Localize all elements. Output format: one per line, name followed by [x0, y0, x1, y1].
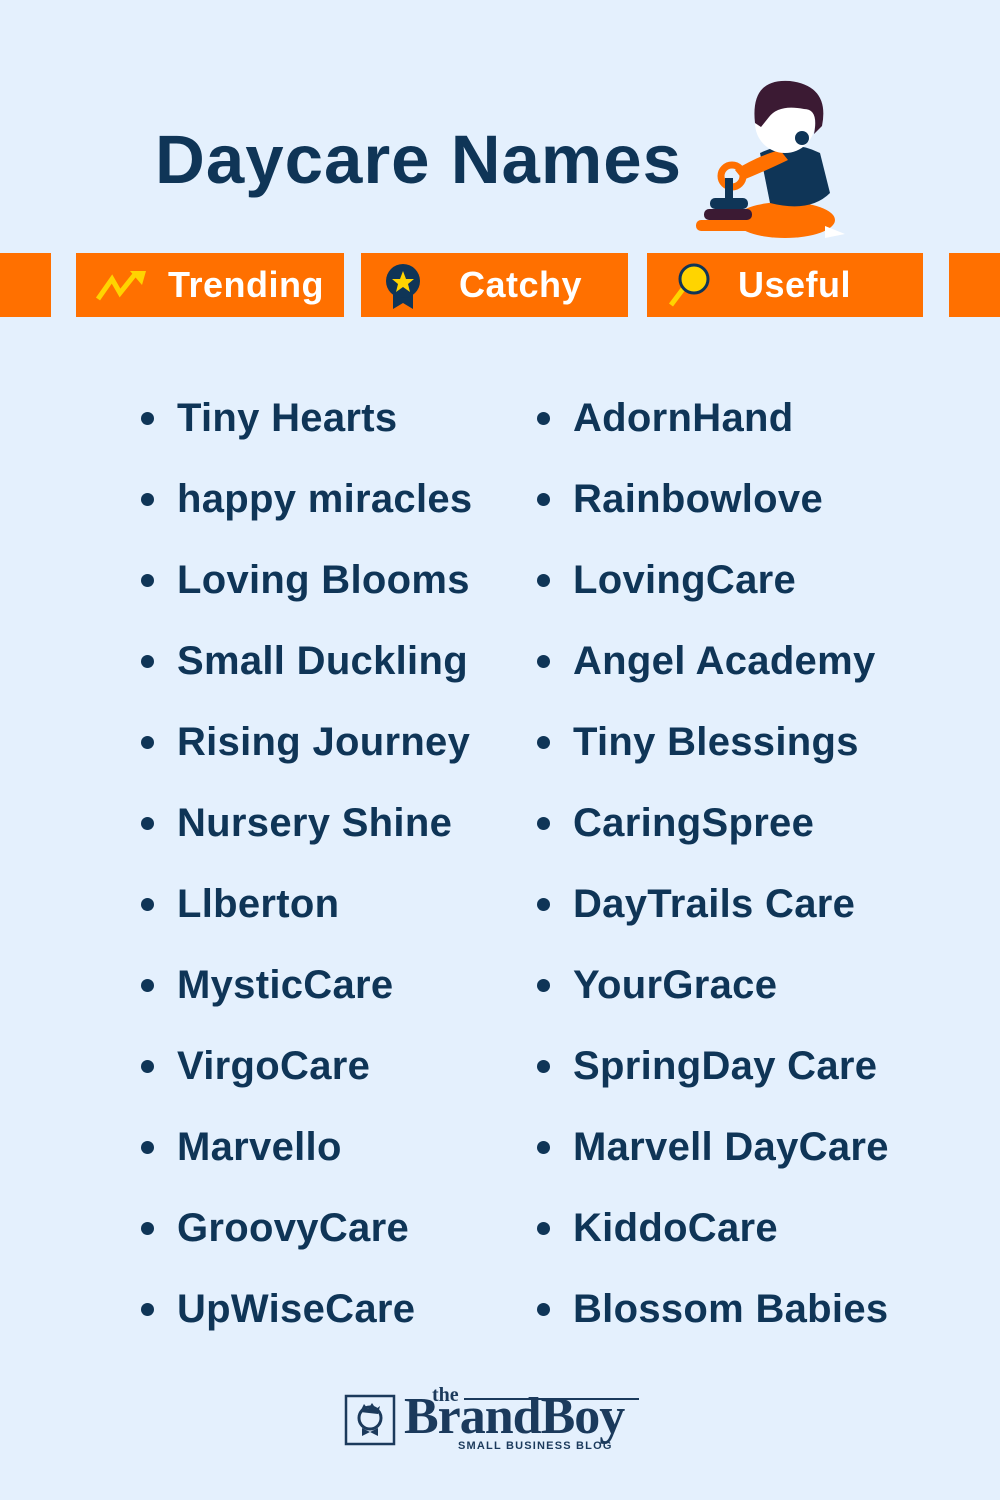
- list: left column: Nursery Shine: [177, 801, 452, 845]
- list: left column: Rising Journey: [177, 720, 470, 764]
- list: left column: [141, 396, 472, 1331]
- list: left column: Llberton: [177, 882, 339, 926]
- list: left column: Small Duckling: [177, 639, 468, 683]
- list: left column: MysticCare: [177, 963, 393, 1007]
- logo: the BrandBoy: the: [432, 1384, 459, 1406]
- logo: the BrandBoy: [344, 1384, 639, 1452]
- list: right column: CaringSpree: [573, 801, 814, 845]
- tab: Useful: Useful: [738, 264, 851, 305]
- list: left column: GroovyCare: [177, 1206, 409, 1250]
- list: left column: VirgoCare: [177, 1044, 370, 1088]
- icon: trend arrow: [96, 271, 146, 300]
- logo: the BrandBoy: SMALL BUSINESS BLOG: [458, 1440, 613, 1452]
- list: right column: KiddoCare: [573, 1206, 778, 1250]
- list: right column: DayTrails Care: [573, 882, 855, 926]
- list: right column: Blossom Babies: [573, 1287, 888, 1331]
- list: right column: AdornHand: [573, 396, 793, 440]
- list: right column: [537, 396, 889, 1331]
- list: left column: happy miracles: [177, 477, 472, 521]
- list: right column: YourGrace: [573, 963, 777, 1007]
- list: right column: Marvell DayCare: [573, 1125, 889, 1169]
- list: left column: Marvello: [177, 1125, 342, 1169]
- tab: Catchy: [361, 253, 628, 317]
- tab stub left: [0, 253, 51, 317]
- icon: award badge: [386, 264, 420, 309]
- icon: child stacking rings: [696, 80, 844, 238]
- tab: Trending: Trending: [168, 264, 324, 305]
- list: left column: Loving Blooms: [177, 558, 470, 602]
- icon: logo face: [344, 1394, 396, 1446]
- tab stub right: [949, 253, 1000, 317]
- list: right column: LovingCare: [573, 558, 796, 602]
- tab: Useful: [647, 253, 923, 317]
- list: right column: Angel Academy: [573, 639, 876, 683]
- list: left column: Tiny Hearts: [177, 396, 397, 440]
- list: right column: Rainbowlove: [573, 477, 823, 521]
- logo: the BrandBoy: BrandBoy: [404, 1388, 624, 1445]
- title: Daycare Names: [155, 121, 682, 198]
- list: left column: UpWiseCare: [177, 1287, 415, 1331]
- tab: Trending: [76, 253, 344, 317]
- list: right column: Tiny Blessings: [573, 720, 859, 764]
- list: right column: SpringDay Care: [573, 1044, 877, 1088]
- tab: Catchy: Catchy: [459, 264, 582, 305]
- icon: magnifier: [669, 264, 710, 306]
